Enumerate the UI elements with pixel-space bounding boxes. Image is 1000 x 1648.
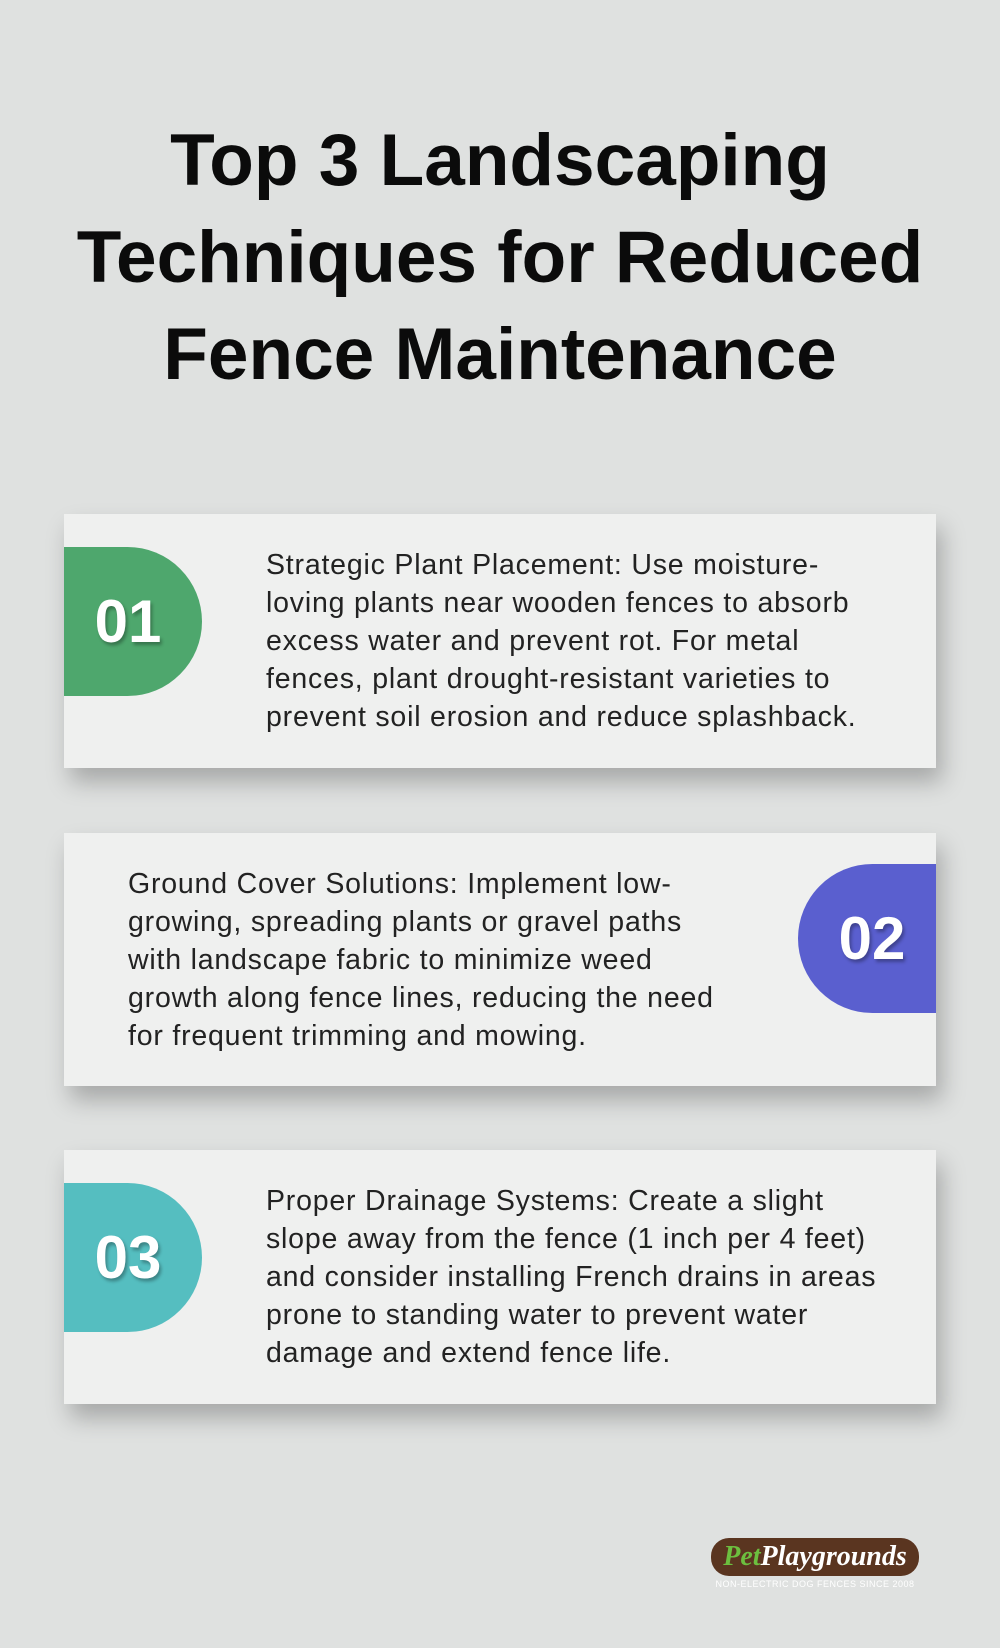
text 03: and consider installing French drains in areas bbox=[266, 1261, 876, 1293]
text 02: with landscape fabric to minimize weed bbox=[128, 944, 653, 976]
panel: 03 bbox=[64, 1150, 936, 1404]
text 02: growth along fence lines, reducing the need bbox=[128, 982, 714, 1014]
logo bbox=[711, 1538, 919, 1589]
text 01: loving plants near wooden fences to absorb bbox=[266, 587, 849, 619]
title: Top 3 Landscaping bbox=[170, 120, 830, 201]
panel: 01 bbox=[64, 514, 936, 768]
tagline: NON-ELECTRIC DOG FENCES SINCE 2008 bbox=[715, 1579, 915, 1589]
text 02: Ground Cover Solutions: Implement low- bbox=[128, 868, 672, 900]
badge 03 bbox=[64, 1183, 202, 1332]
badge 01 bbox=[64, 547, 202, 696]
text 02: for frequent trimming and mowing. bbox=[128, 1020, 587, 1052]
title: Techniques for Reduced bbox=[77, 217, 923, 298]
panel: 02 bbox=[64, 833, 936, 1086]
text 03: slope away from the fence (1 inch per 4 feet) bbox=[266, 1223, 866, 1255]
badge 01: 01 bbox=[95, 588, 161, 655]
logo wordmark: PetPlaygrounds bbox=[723, 1541, 907, 1572]
title bbox=[77, 120, 923, 395]
text 03: prone to standing water to prevent water bbox=[266, 1299, 808, 1331]
text 01: Strategic Plant Placement: Use moisture- bbox=[266, 549, 819, 581]
text 02 bbox=[128, 868, 714, 1052]
text 03 bbox=[266, 1185, 876, 1369]
badge 02 bbox=[798, 864, 936, 1013]
text 03: Proper Drainage Systems: Create a slight bbox=[266, 1185, 824, 1217]
title: Fence Maintenance bbox=[163, 314, 837, 395]
text 03: damage and extend fence life. bbox=[266, 1337, 671, 1369]
text 02: growing, spreading plants or gravel paths bbox=[128, 906, 682, 938]
text 01: fences, plant drought-resistant varieties to bbox=[266, 663, 830, 695]
text 01: excess water and prevent rot. For metal bbox=[266, 625, 799, 657]
text 01 bbox=[266, 549, 856, 733]
badge 02: 02 bbox=[839, 905, 905, 972]
badge 03: 03 bbox=[95, 1224, 161, 1291]
text 01: prevent soil erosion and reduce splashback. bbox=[266, 701, 856, 733]
